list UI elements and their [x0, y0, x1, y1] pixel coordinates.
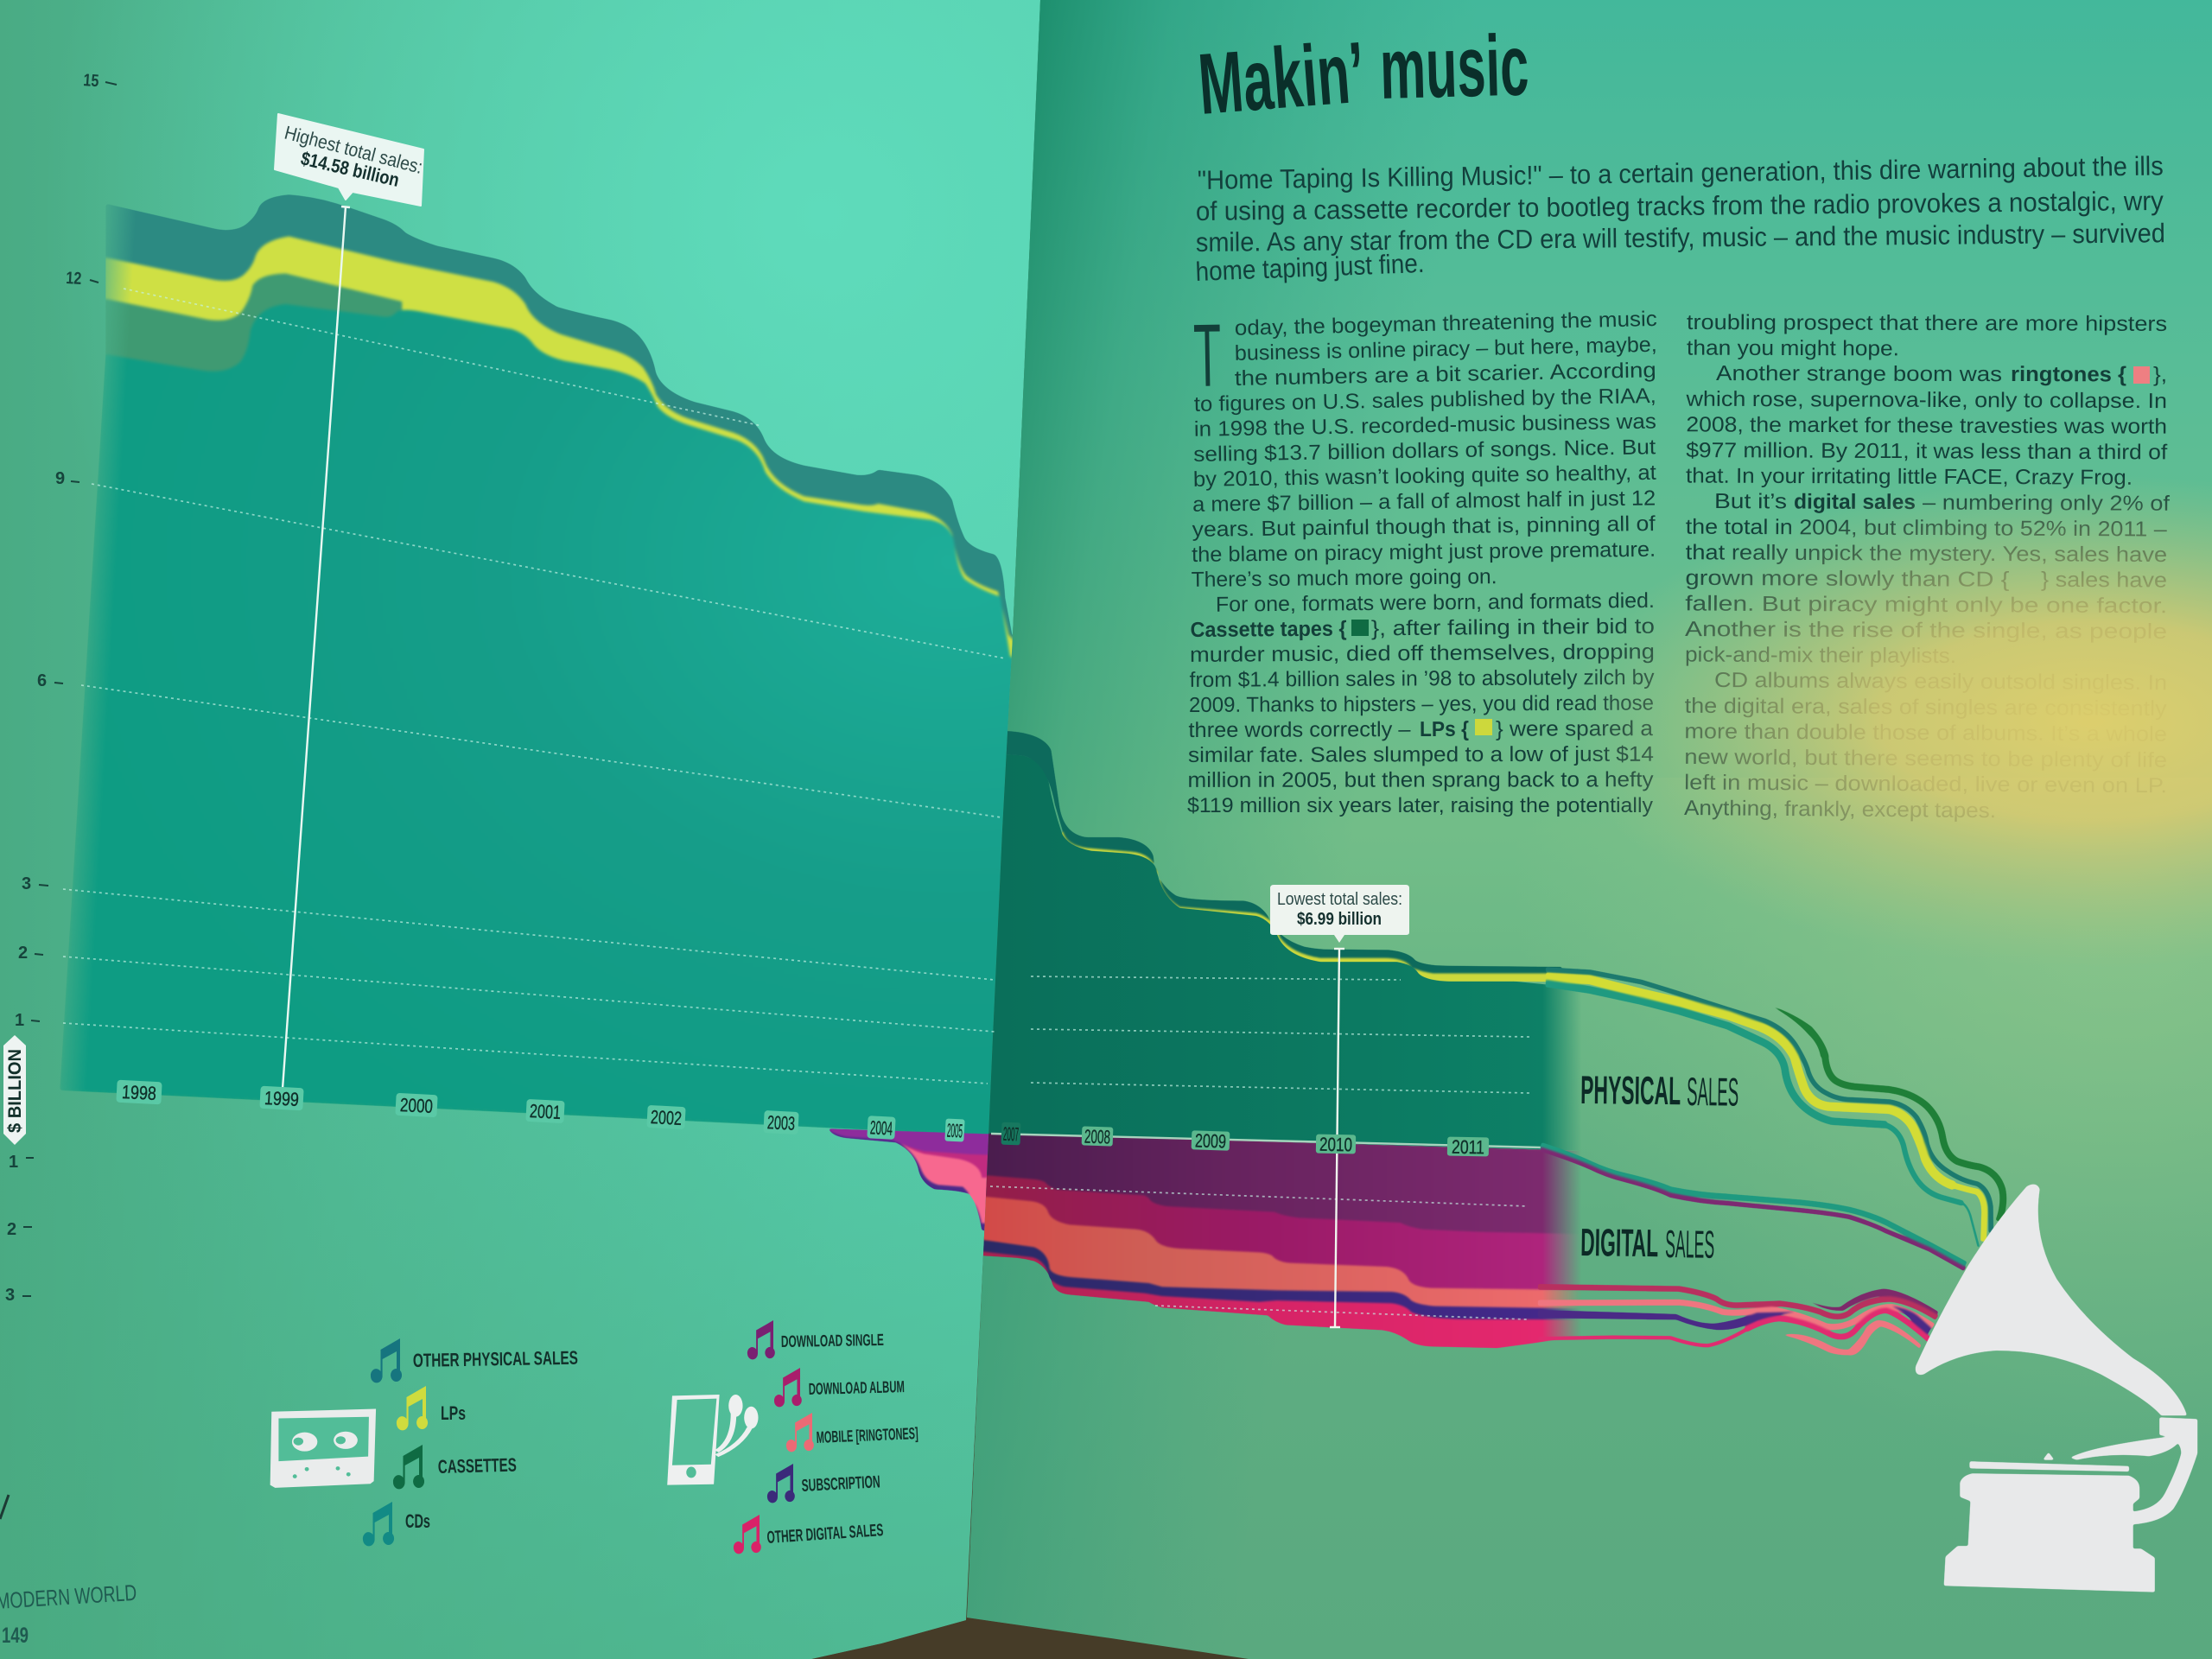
text: mobile ringtones: MOBILE [RINGTONES]	[816, 1425, 918, 1447]
chart: physical thin bands, right page	[982, 729, 1562, 982]
band: other digital sales	[977, 1134, 1611, 1348]
text: CDs: CDs	[405, 1510, 430, 1532]
article column one: years. But painful though that is, pinning all of	[1192, 512, 1656, 542]
text: SALES	[1665, 1222, 1715, 1267]
ribbon: LPs	[1546, 977, 1985, 1242]
ribbon: download album	[1538, 1287, 1937, 1318]
gridlines: dollar scale, left page	[63, 289, 1005, 1084]
y axis labels: 3	[22, 874, 31, 893]
panel: right page background	[950, 0, 2212, 1659]
band: LPs, right page	[1061, 832, 1562, 982]
year 2008	[1082, 1125, 1113, 1148]
band: other physical, right page	[982, 729, 1562, 973]
swatch: cassettes	[1351, 620, 1369, 636]
band: download album	[977, 1134, 1611, 1290]
band: other physical sales	[60, 194, 1058, 1139]
legend: digital formats	[667, 1320, 918, 1554]
gramophone knob	[2043, 1452, 2054, 1460]
article column one: in 1998 the U.S. recorded-music business was	[1194, 410, 1656, 442]
year 2000: 2000	[399, 1094, 434, 1117]
footer: section title and page number	[0, 1495, 137, 1648]
icon: note cassettes	[393, 1445, 424, 1489]
article column one: million in 2005, but then sprang back to a hefty	[1187, 768, 1654, 792]
footer: section title and page number: MODERN WORLD	[0, 1580, 137, 1614]
year 2003	[763, 1110, 799, 1135]
article column one: business is online piracy – but here, maybe,	[1235, 334, 1657, 365]
callout: lowest total sales: $6.99 billion	[1297, 910, 1382, 929]
icon: note CDs	[363, 1502, 394, 1546]
article column one: three words correctly –	[1188, 718, 1411, 742]
band: ringtones	[896, 1134, 1023, 1224]
year 2002: 2002	[650, 1106, 683, 1129]
y axis labels: 1	[15, 1011, 24, 1030]
article column one: LPs {	[1420, 718, 1469, 741]
article column two: } sales have	[2041, 569, 2167, 593]
icon: note download single	[747, 1320, 775, 1359]
article column two: the digital era, sales of singles are consistently	[1685, 695, 2168, 721]
band: subscription	[829, 1128, 1023, 1239]
y axis labels: 12	[66, 269, 82, 289]
drop cap T: T	[1192, 305, 1222, 405]
text: other physical sales: OTHER PHYSICAL SALES	[413, 1347, 578, 1371]
year 1999: 1999	[264, 1087, 300, 1110]
article column two: CD albums always easily outsold singles. In	[1714, 669, 2167, 695]
text: other digital sales: OTHER DIGITAL SALES	[766, 1521, 884, 1548]
article column one: from $1.4 billion sales in ’98 to absolutely zilch by	[1189, 666, 1655, 692]
article column one: murder music, died off themselves, dropping	[1190, 640, 1655, 667]
article column one: }, after failing in their bid to	[1371, 615, 1655, 640]
ribbon: ringtones	[1538, 1302, 1933, 1327]
label: physical sales: PHYSICAL	[1580, 1067, 1681, 1113]
article column two: Another is the rise of the single, as people	[1685, 618, 2167, 644]
article column two: which rose, supernova-like, only to collapse. In	[1685, 388, 2167, 413]
year 2010: 2010	[1319, 1134, 1352, 1155]
article column one: the blame on piracy might just prove premature.	[1192, 538, 1656, 567]
band: ringtones	[977, 1134, 1611, 1309]
article column two: $977 million. By 2011, it was less than a third of	[1686, 439, 2167, 464]
article column one: For one, formats were born, and formats died.	[1216, 589, 1655, 617]
year 2011: 2011	[1452, 1136, 1484, 1158]
text: SALES	[1687, 1069, 1738, 1115]
icon: note mobile ringtones	[786, 1413, 814, 1452]
article column two: Another strange boom was	[1716, 362, 2002, 386]
article column one: to figures on U.S. sales published by the RIAA,	[1194, 385, 1656, 416]
ribbon: download single upper	[1541, 1149, 1965, 1269]
callout: lowest total sales	[1270, 885, 1409, 943]
band: download single	[977, 1134, 1611, 1235]
article column one: Cassette tapes {	[1190, 618, 1347, 642]
ribbon: subscription	[1538, 1310, 1795, 1330]
y axis labels: 2	[18, 944, 28, 963]
article column one: a mere $7 billion – a fall of almost half in just 12	[1192, 486, 1656, 517]
icon: note other digital	[734, 1515, 761, 1554]
ribbon: purple tail	[1804, 1289, 1938, 1314]
article column two: fallen. But piracy might only be one factor.	[1685, 592, 2167, 618]
chart: baseline, right page	[991, 1134, 1541, 1147]
y axis labels: 3	[5, 1286, 15, 1305]
y axis labels: 6	[37, 671, 47, 690]
ribbon: teal upper digital	[1541, 1145, 1966, 1264]
year labels along baseline: 2007	[1003, 1123, 1019, 1145]
article column one: by 2010, this wasn’t looking quite so healthy, at	[1193, 461, 1656, 492]
legend: physical formats	[270, 1338, 578, 1546]
band: LPs	[60, 237, 1058, 1139]
year 2004	[867, 1116, 896, 1140]
article column one	[1187, 305, 1657, 817]
title: music	[1379, 17, 1530, 118]
y axis labels: 15	[83, 71, 99, 91]
article column two: – numbering only 2% of	[1923, 492, 2170, 516]
article column two: 2008, the market for these travesties was worth	[1686, 413, 2167, 439]
title: Makin’	[1195, 24, 1368, 133]
article column two: },	[2153, 363, 2167, 387]
year 2009: 2009	[1195, 1129, 1226, 1153]
label: digital sales: DIGITAL	[1580, 1220, 1659, 1265]
article column two: pick-and-mix their playlists.	[1685, 644, 1956, 668]
callout: highest total sales: Highest total sales:	[283, 122, 425, 178]
article column two: But it’s	[1714, 490, 1787, 513]
article column one: similar fate. Sales slumped to a low of just $14	[1188, 743, 1654, 767]
article column two: ringtones {	[2011, 363, 2127, 386]
article column one: 2009. Thanks to hipsters – yes, you did read those	[1189, 691, 1654, 717]
article column two	[1684, 311, 2170, 823]
swatch: ringtones	[2133, 366, 2150, 384]
ribbon: other digital	[1538, 1311, 1929, 1345]
article column two: troubling prospect that there are more hipsters	[1687, 311, 2167, 336]
text: cassettes: CASSETTES	[437, 1454, 517, 1478]
y axis labels: 9	[55, 469, 65, 488]
article column two: Anything, frankly, except tapes.	[1684, 797, 1996, 823]
swatch: LPs	[1475, 719, 1492, 735]
gramophone horn	[1916, 1185, 2187, 1415]
article column one: oday, the bogeyman threatening the music	[1235, 308, 1657, 340]
gramophone tone arm	[2133, 1418, 2197, 1524]
intro paragraph: home taping just fine.	[1195, 248, 1425, 287]
ribbon: lower ringtones	[1783, 1320, 1921, 1355]
band: download album	[896, 1134, 1023, 1178]
article column one: selling $13.7 billion dollars of songs. Nice. But	[1193, 435, 1656, 467]
chart: physical sales stream, left page	[60, 194, 1058, 1139]
ribbon: CDs	[1546, 983, 1979, 1247]
article column two: digital sales	[1794, 491, 1916, 514]
icon: note subscription	[767, 1464, 795, 1503]
year 2001: 2001	[529, 1100, 562, 1123]
intro paragraph: "Home Taping Is Killing Music!" – to a certain generation, this dire warning about the ills	[1198, 150, 2164, 195]
article column one: $119 million six years later, raising the potentially	[1187, 794, 1654, 817]
article column one: the numbers are a bit scarier. According	[1235, 359, 1656, 391]
article column two: new world, but there seems to be plenty of life	[1684, 746, 2167, 772]
icon: note download album	[774, 1368, 802, 1407]
chart: physical body, right page	[982, 753, 1634, 1152]
text: LPs: LPs	[441, 1402, 466, 1424]
gramophone needle arm	[2070, 1435, 2183, 1460]
icon: gramophone	[1916, 1185, 2197, 1592]
article column two: more than double those of albums. It’s a whole	[1684, 720, 2167, 747]
panel: left page background	[0, 0, 1123, 1659]
chart: flowing ribbons into gramophone horn	[1538, 969, 2003, 1355]
icon: note LPs	[397, 1386, 428, 1430]
callout: lowest total sales: Lowest total sales:	[1277, 890, 1402, 909]
photo glare over right page	[1564, 475, 2212, 968]
article column two: than you might hope.	[1687, 337, 1899, 360]
text: download album: DOWNLOAD ALBUM	[809, 1378, 905, 1399]
band: subscription	[977, 1134, 1611, 1319]
band: download single	[829, 1128, 1023, 1156]
ribbon: other physical	[1546, 969, 1991, 1233]
year 2005	[944, 1118, 965, 1142]
gramophone cabinet	[1944, 1473, 2155, 1592]
year 2007	[1001, 1122, 1020, 1145]
intro paragraph: of using a cassette recorder to bootleg tracks from the radio provokes a nostalgic, wry	[1196, 186, 2164, 226]
year 2003: 2003	[766, 1111, 796, 1135]
year labels along baseline	[116, 1080, 1489, 1158]
article column one: There’s so much more going on.	[1191, 565, 1497, 592]
intro paragraph	[1195, 150, 2165, 287]
ribbon: cassettes	[1770, 1005, 2003, 1221]
band: cassettes	[105, 274, 402, 386]
callout: highest total sales: $14.58 billion	[299, 148, 402, 191]
callout: highest total sales	[275, 114, 425, 206]
footer: section title and page number: 149	[2, 1624, 29, 1648]
axis unit tag: $ billion: $ BILLION	[5, 1049, 25, 1133]
icon: note other physical	[371, 1338, 402, 1382]
article column one: } were spared a	[1496, 717, 1653, 741]
gridlines: dollar scale, right page	[990, 976, 1529, 1319]
article column two: grown more slowly than CD {	[1685, 567, 2010, 592]
highlight line: 1999 peak	[283, 207, 350, 1089]
chart: digital sales bands, right page	[977, 1134, 1611, 1348]
band: CDs main body	[60, 304, 1058, 1139]
y axis labels: 1	[9, 1153, 18, 1172]
article column two: the total in 2004, but climbing to 52% in 2011 –	[1686, 516, 2167, 542]
gramophone platter	[1970, 1461, 2129, 1471]
y axis labels	[5, 71, 117, 1305]
article column two: left in music – downloaded, live or even on LP.	[1684, 771, 2167, 798]
y axis labels: 2	[7, 1220, 16, 1239]
intro paragraph: smile. As any star from the CD era will testify, music – and the music industry – survived	[1196, 218, 2165, 257]
year 2008: 2008	[1084, 1125, 1110, 1148]
text: subscription: SUBSCRIPTION	[801, 1472, 880, 1496]
text: download single: DOWNLOAD SINGLE	[781, 1332, 884, 1351]
icon: cassette tape	[270, 1409, 376, 1488]
article column two: that really unpick the mystery. Yes, sales have	[1686, 541, 2167, 567]
year 2004: 2004	[869, 1116, 893, 1140]
year 1998: 1998	[121, 1081, 157, 1104]
year labels along baseline: 2005	[946, 1120, 963, 1141]
article column two: that. In your irritating little FACE, Crazy Frog.	[1686, 465, 2133, 490]
chart: digital sales stream, left page	[829, 1128, 1023, 1239]
ribbon: subscription tail	[1892, 1306, 1931, 1336]
highlight line: 2010 low	[1330, 949, 1344, 1327]
icon: music player with earphones	[667, 1395, 759, 1485]
